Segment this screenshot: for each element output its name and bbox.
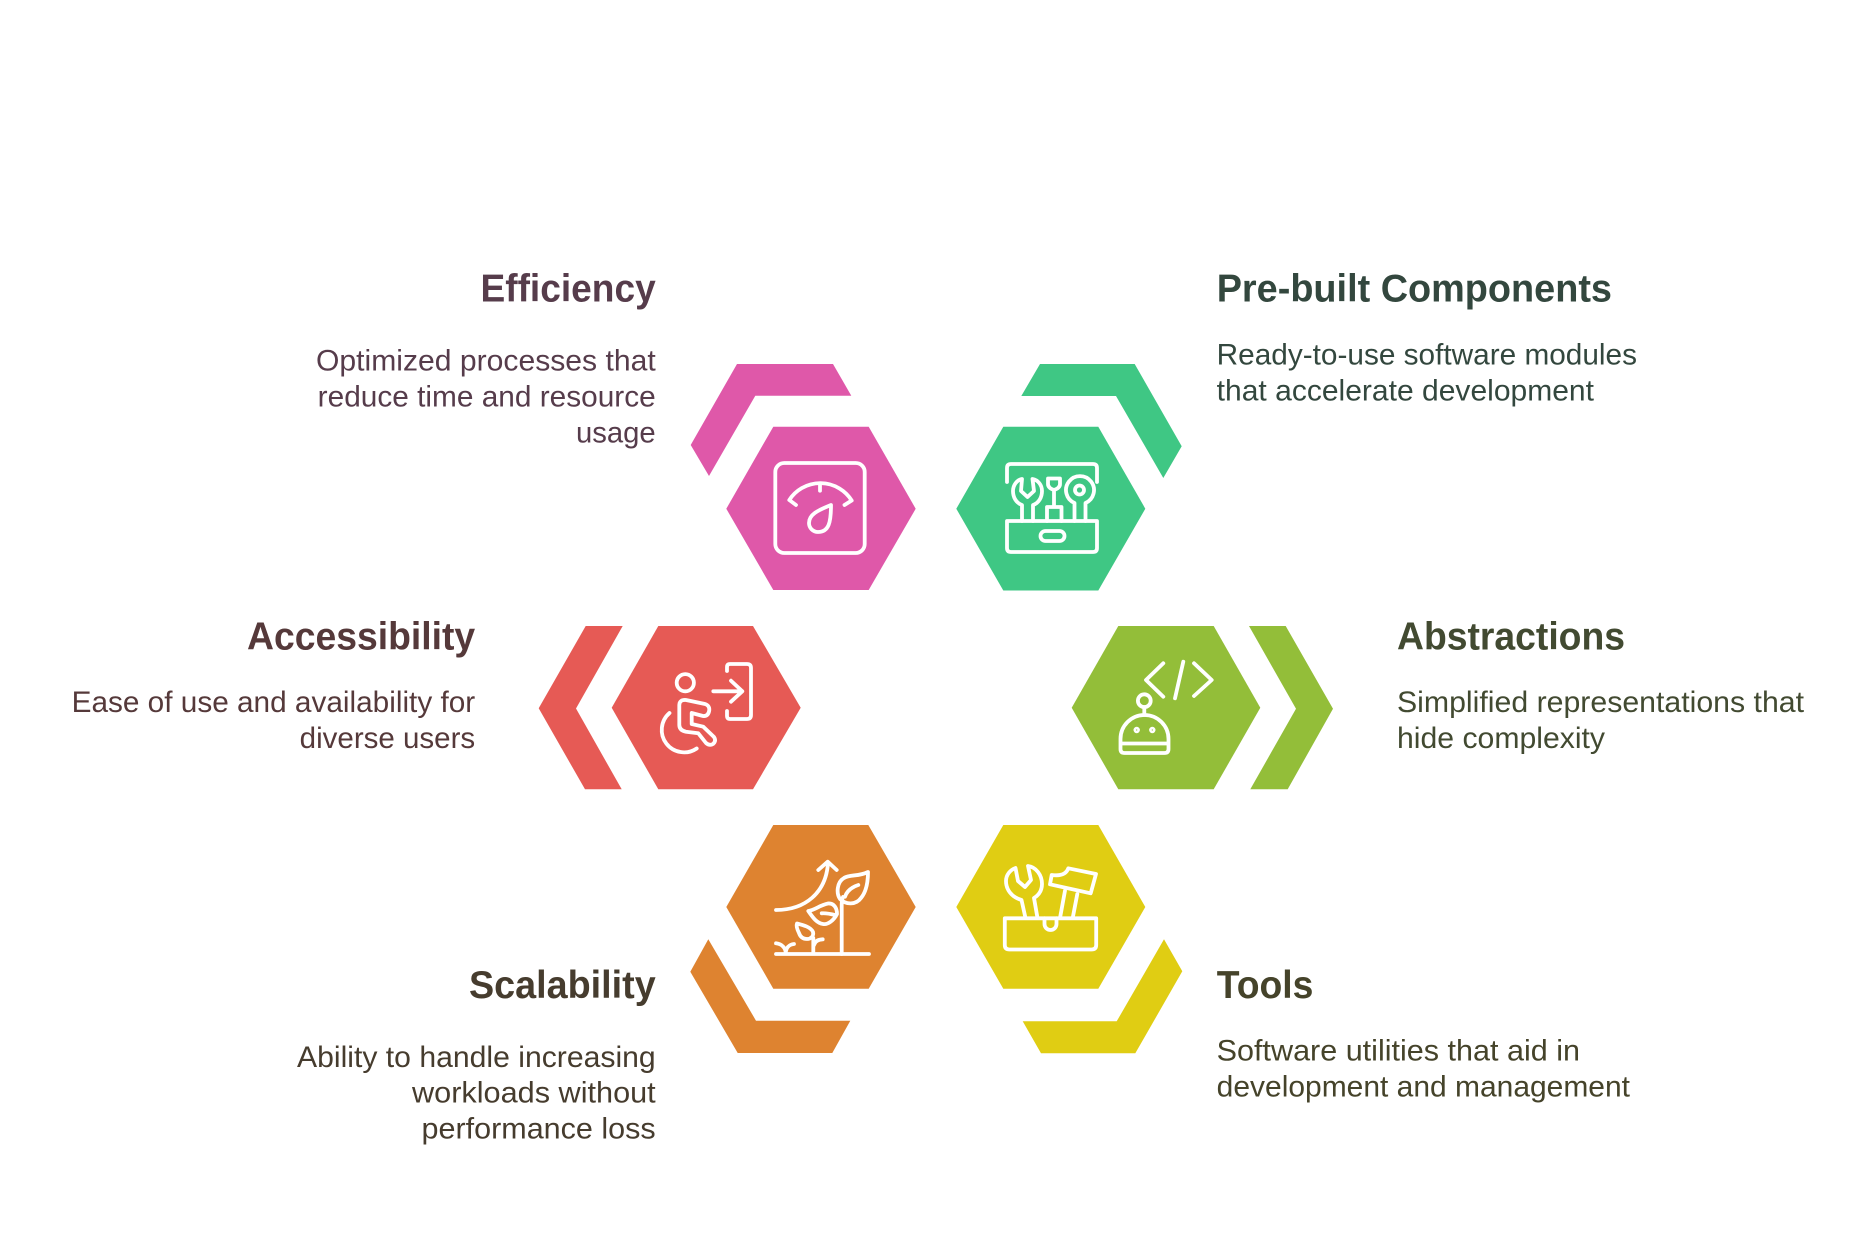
accessibility description: Ease of use and availability for xyxy=(72,686,475,719)
tools description: development and management xyxy=(1217,1070,1630,1104)
abstractions heading: Abstractions xyxy=(1397,616,1625,659)
accessibility description: diverse users xyxy=(300,722,475,755)
pre-built components description: that accelerate development xyxy=(1217,374,1594,408)
abstractions description: hide complexity xyxy=(1397,722,1605,755)
accessibility chevron xyxy=(539,626,623,789)
efficiency hexagon xyxy=(726,427,916,590)
scalability hexagon xyxy=(726,825,916,989)
panel: tools xyxy=(956,825,1630,1104)
panel: accessibility xyxy=(72,616,801,789)
scalability description: performance loss xyxy=(422,1112,656,1145)
accessibility heading: Accessibility xyxy=(247,616,476,659)
scalability description: Ability to handle increasing xyxy=(297,1041,656,1074)
efficiency description: Optimized processes that xyxy=(316,345,656,378)
abstractions hexagon xyxy=(1072,626,1260,789)
scalability heading: Scalability xyxy=(469,964,656,1007)
scalability chevron xyxy=(690,939,850,1053)
tools description xyxy=(1217,1035,1630,1104)
abstractions chevron xyxy=(1249,626,1333,789)
tools chevron xyxy=(1023,939,1182,1053)
icon: wheelchair user entering door xyxy=(662,664,751,752)
icon: toolbox with tools xyxy=(1007,464,1097,552)
pre-built components description xyxy=(1217,339,1637,408)
icon: robot with code brackets xyxy=(1120,662,1212,753)
pre-built components description: Ready-to-use software modules xyxy=(1217,339,1637,372)
panel: efficiency xyxy=(316,268,916,590)
scalability description: workloads without xyxy=(411,1077,656,1110)
scalability description xyxy=(297,1041,656,1145)
panel: abstractions xyxy=(1072,616,1804,789)
efficiency heading: Efficiency xyxy=(480,268,656,311)
pre-built components hexagon xyxy=(956,427,1145,590)
panel: scalability xyxy=(297,825,916,1145)
pre-built components heading: Pre-built Components xyxy=(1217,268,1612,311)
abstractions description: Simplified representations that xyxy=(1397,686,1804,719)
efficiency description: reduce time and resource xyxy=(318,380,656,414)
accessibility hexagon xyxy=(612,626,801,789)
pre-built components chevron xyxy=(1021,364,1182,478)
panel: pre-built components xyxy=(956,268,1637,590)
abstractions description xyxy=(1397,686,1804,755)
efficiency chevron xyxy=(691,364,851,476)
tools description: Software utilities that aid in xyxy=(1217,1035,1580,1068)
tools hexagon xyxy=(956,825,1145,989)
tools heading: Tools xyxy=(1217,964,1313,1007)
icon: toolbox with wrench and hammer xyxy=(1005,866,1096,950)
efficiency description xyxy=(316,345,656,449)
efficiency description: usage xyxy=(576,416,656,449)
icon: growing plant with arrow xyxy=(776,862,869,954)
icon: gauge scale xyxy=(775,463,865,553)
accessibility description xyxy=(72,686,475,755)
